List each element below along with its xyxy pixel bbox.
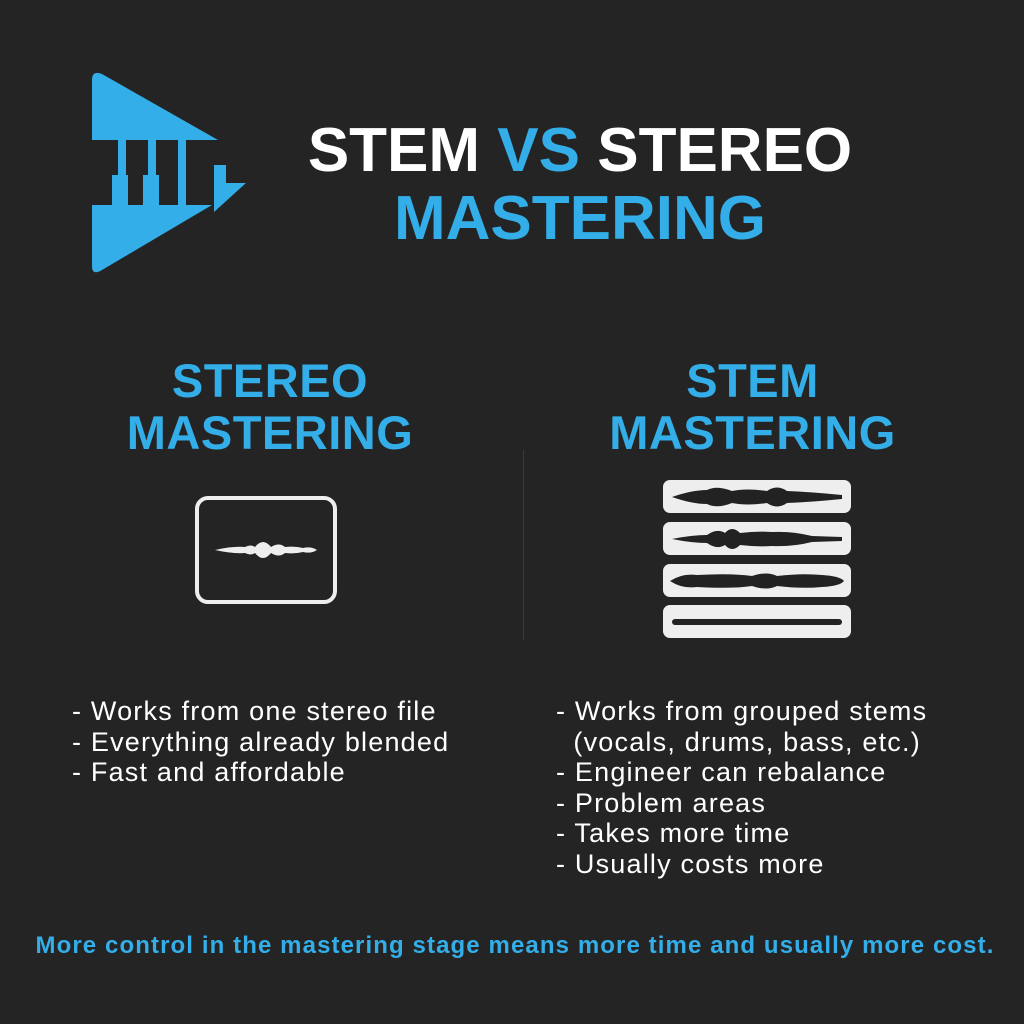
heading: stereo mastering bbox=[127, 354, 413, 459]
text: stem bullets: - Works from grouped stems (vocals, drums, bass, etc.) - Engineer can rebalance - Problem areas - Takes more time - Usually costs more bbox=[556, 696, 927, 878]
title: MASTERING bbox=[394, 184, 766, 253]
divider bbox=[523, 450, 524, 640]
heading: stem mastering bbox=[609, 354, 896, 459]
heading: stem mastering: MASTERING bbox=[609, 406, 896, 459]
title: STEM VS STEREO bbox=[308, 116, 852, 185]
footer callout: More control in the mastering stage means more time and usually more cost. bbox=[36, 932, 994, 959]
text: stereo bullets: - Works from one stereo file - Everything already blended - Fast and affordable bbox=[72, 696, 449, 787]
logo bbox=[92, 72, 246, 272]
heading: stereo mastering: MASTERING bbox=[127, 406, 413, 459]
icon: stem waveforms bbox=[663, 480, 851, 638]
title bbox=[308, 116, 852, 253]
heading: stem mastering: STEM bbox=[686, 354, 819, 407]
icon: stereo waveform bbox=[195, 496, 337, 604]
heading: stereo mastering: STEREO bbox=[172, 354, 368, 407]
